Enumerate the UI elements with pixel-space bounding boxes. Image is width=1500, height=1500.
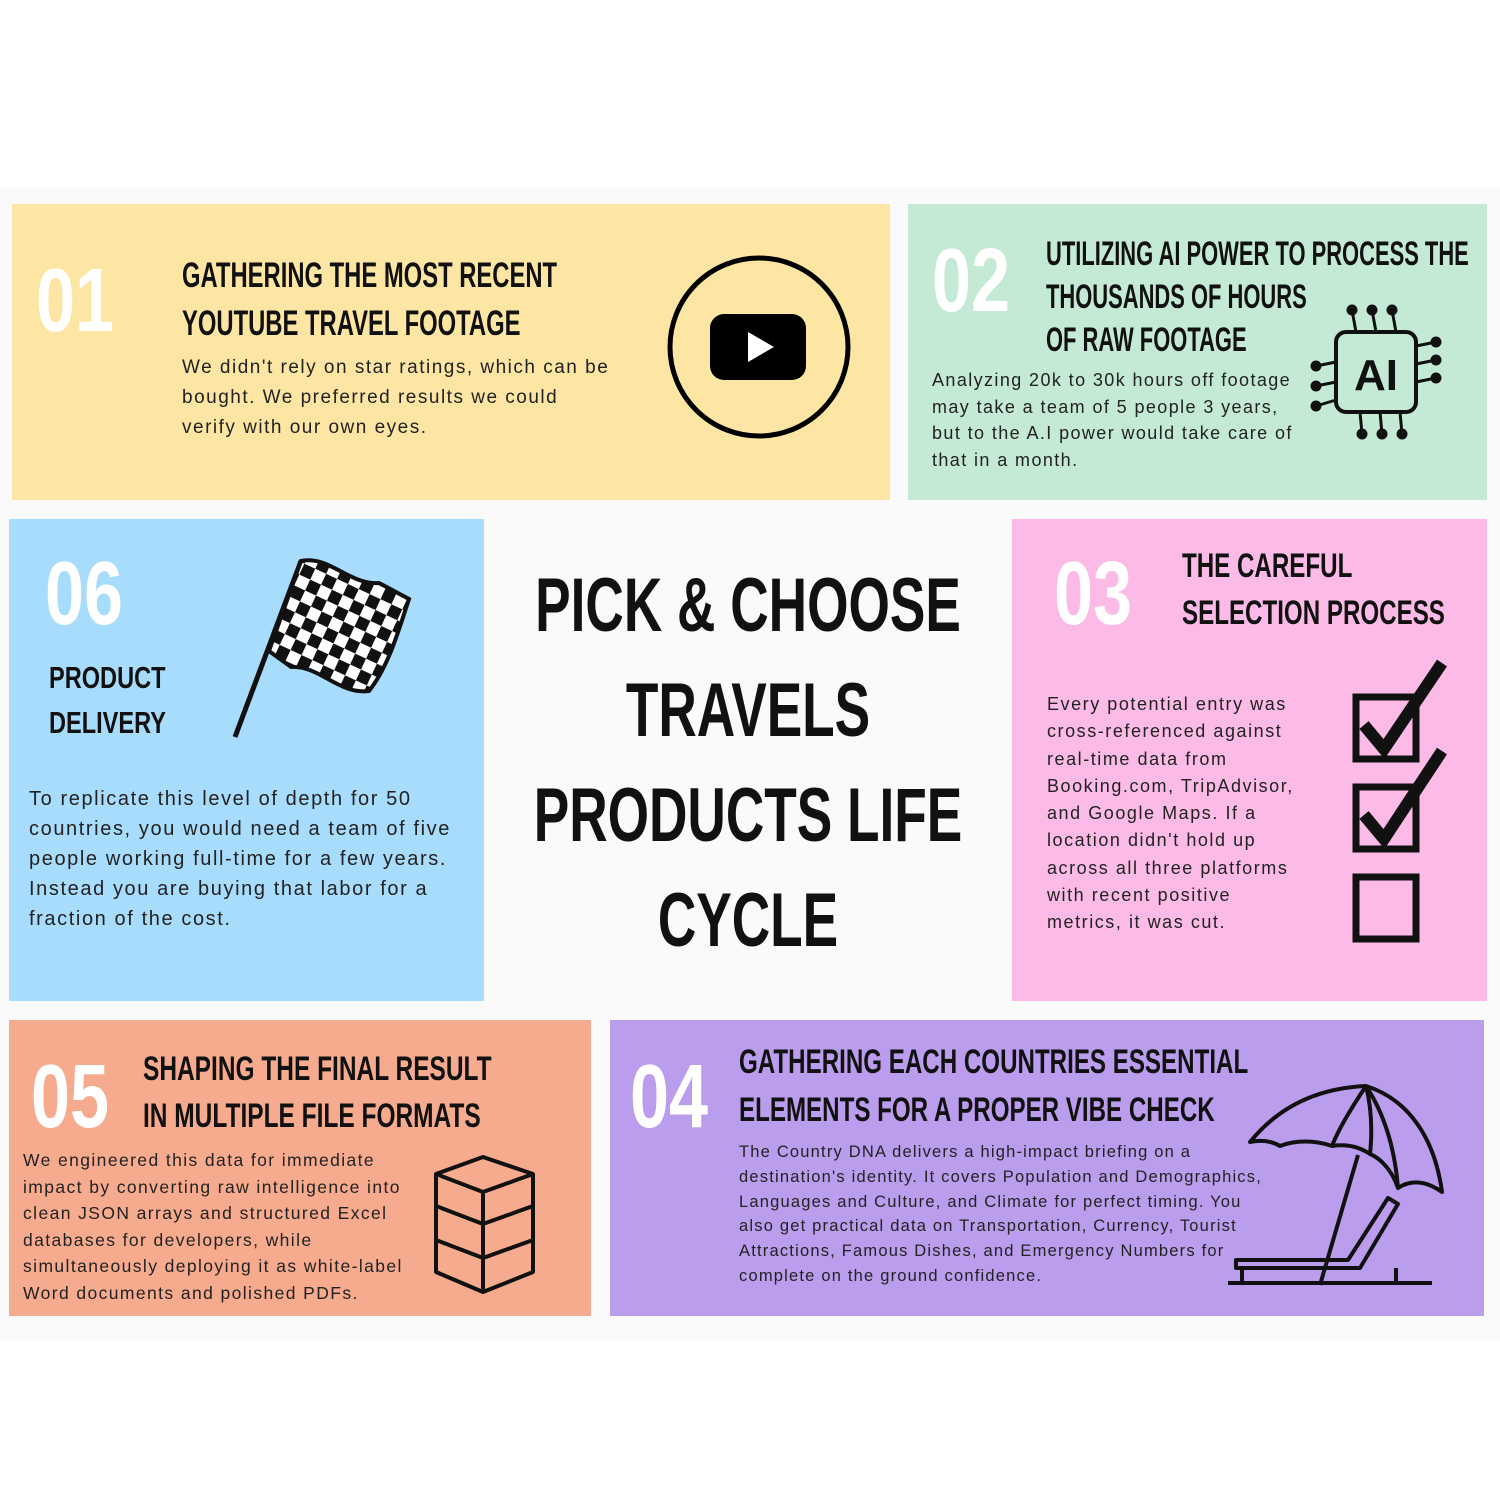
text 04: Languages and Culture, and Climate for perfect timing. You xyxy=(739,1193,1242,1211)
text 06 xyxy=(29,788,451,930)
text 05 xyxy=(23,1150,403,1303)
text 06: countries, you would need a team of five xyxy=(29,818,451,840)
number 02: 02 xyxy=(932,231,1010,331)
text 05: simultaneously deploying it as white-label xyxy=(23,1256,403,1276)
text 04: The Country DNA delivers a high-impact briefing on a xyxy=(739,1143,1191,1161)
text 03: metrics, it was cut. xyxy=(1047,912,1226,932)
number 04: 04 xyxy=(630,1047,708,1147)
number 03: 03 xyxy=(1054,544,1132,644)
heading 05 xyxy=(143,1050,492,1135)
text 05: impact by converting raw intelligence into xyxy=(23,1177,401,1197)
text 01: bought. We preferred results we could xyxy=(182,387,558,408)
text 04: complete on the ground confidence. xyxy=(739,1267,1042,1285)
heading 04: ELEMENTS FOR A PROPER VIBE CHECK xyxy=(739,1091,1215,1129)
text 03: with recent positive xyxy=(1047,885,1231,905)
text 02 xyxy=(932,370,1293,470)
title: PICK & CHOOSE xyxy=(535,563,961,648)
text 03: real-time data from xyxy=(1047,749,1228,769)
heading 01: GATHERING THE MOST RECENT xyxy=(182,256,557,295)
heading 03: SELECTION PROCESS xyxy=(1182,594,1445,632)
heading 03 xyxy=(1182,547,1445,632)
heading 02: OF RAW FOOTAGE xyxy=(1046,321,1247,359)
title: PRODUCTS LIFE xyxy=(534,773,962,858)
panel: 04 vibe check xyxy=(610,1020,1484,1316)
text 03: across all three platforms xyxy=(1047,858,1288,878)
heading 06 xyxy=(49,660,166,740)
number 06: 06 xyxy=(45,544,123,644)
heading 01: YOUTUBE TRAVEL FOOTAGE xyxy=(182,304,521,343)
text 03: Every potential entry was xyxy=(1047,694,1287,714)
text 02: but to the A.I power would take care of xyxy=(932,423,1293,443)
text 01 xyxy=(182,357,609,438)
heading 05: SHAPING THE FINAL RESULT xyxy=(143,1050,492,1088)
text 03: and Google Maps. If a xyxy=(1047,803,1257,823)
heading 02 xyxy=(1046,235,1469,359)
heading 02: UTILIZING AI POWER TO PROCESS THE xyxy=(1046,235,1469,273)
icon: AI chip: AI xyxy=(1354,351,1398,400)
text 04: destination's identity. It covers Population and Demographics, xyxy=(739,1168,1262,1186)
title xyxy=(534,563,962,963)
text 04 xyxy=(739,1143,1262,1285)
text 02: may take a team of 5 people 3 years, xyxy=(932,397,1279,417)
icon: youtube play xyxy=(668,256,850,438)
icon: checkered flag xyxy=(232,558,412,738)
heading 05: IN MULTIPLE FILE FORMATS xyxy=(143,1097,481,1135)
text 02: that in a month. xyxy=(932,450,1078,470)
text 06: To replicate this level of depth for 50 xyxy=(29,788,412,810)
heading 04: GATHERING EACH COUNTRIES ESSENTIAL xyxy=(739,1043,1248,1081)
panel: 03 selection process xyxy=(1012,519,1487,1001)
number 05: 05 xyxy=(31,1047,109,1147)
heading 04 xyxy=(739,1043,1248,1129)
panel: 05 file formats xyxy=(9,1020,591,1316)
text 04: also get practical data on Transportation, Currency, Tourist xyxy=(739,1217,1237,1235)
text 05: Word documents and polished PDFs. xyxy=(23,1283,359,1303)
heading 06: PRODUCT xyxy=(49,660,165,695)
text 01: We didn't rely on star ratings, which can be xyxy=(182,357,609,378)
text 03: location didn't hold up xyxy=(1047,830,1256,850)
text 02: Analyzing 20k to 30k hours off footage xyxy=(932,370,1291,390)
heading 01 xyxy=(182,256,557,343)
text 05: We engineered this data for immediate xyxy=(23,1150,375,1170)
text 03 xyxy=(1047,694,1294,932)
heading 06: DELIVERY xyxy=(49,705,166,740)
title: TRAVELS xyxy=(626,668,870,753)
panel: 06 product delivery xyxy=(9,519,484,1001)
title: CYCLE xyxy=(658,878,838,963)
panel: 02 AI power xyxy=(908,204,1487,500)
text 05: databases for developers, while xyxy=(23,1230,313,1250)
panel: 01 youtube footage xyxy=(12,204,890,500)
icon: checkboxes xyxy=(1352,660,1447,942)
text 04: Attractions, Famous Dishes, and Emergency Numbers for xyxy=(739,1242,1224,1260)
text 06: fraction of the cost. xyxy=(29,908,232,930)
text 06: people working full-time for a few years. xyxy=(29,848,447,870)
text 03: Booking.com, TripAdvisor, xyxy=(1047,776,1294,796)
icon: AI chip xyxy=(1310,304,1442,440)
text 05: clean JSON arrays and structured Excel xyxy=(23,1203,387,1223)
text 03: cross-referenced against xyxy=(1047,721,1282,741)
heading 02: THOUSANDS OF HOURS xyxy=(1046,278,1307,316)
text 01: verify with our own eyes. xyxy=(182,417,428,438)
text 06: Instead you are buying that labor for a xyxy=(29,878,428,900)
number 01: 01 xyxy=(36,251,114,351)
heading 03: THE CAREFUL xyxy=(1182,547,1352,585)
icon: beach umbrella chair xyxy=(1228,1084,1444,1286)
icon: stacked boxes xyxy=(434,1155,535,1294)
